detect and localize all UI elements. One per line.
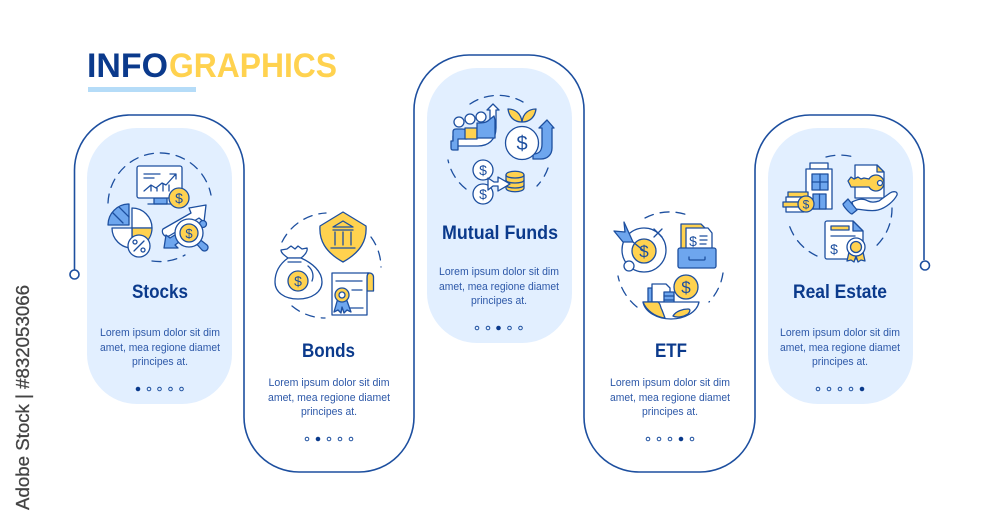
pagination: bonds <box>305 437 353 441</box>
pagination: etf <box>646 437 694 441</box>
text: stocks description: Lorem ipsum dolor sit dim <box>100 327 220 339</box>
icon: bonds: $ <box>294 273 302 289</box>
icon: etf: $ <box>639 242 649 261</box>
icon: mutual funds: $ <box>479 186 487 202</box>
text: real estate description: amet, mea regione diamet <box>780 342 900 354</box>
icon: stocks <box>108 153 211 262</box>
side credit text: Adobe Stock | #832053066 <box>13 285 33 510</box>
text: etf description <box>610 377 730 418</box>
title <box>87 47 337 92</box>
panel: stocks background <box>87 128 232 404</box>
text: mutual funds description: amet, mea regione diamet <box>439 281 559 293</box>
icon: mutual funds <box>448 95 554 204</box>
title: INFO <box>87 47 168 85</box>
text: etf description: principes at. <box>642 406 698 418</box>
icon: stocks: $ <box>185 226 193 241</box>
pagination: mutual funds <box>475 326 522 330</box>
text: stocks description: principes at. <box>132 356 188 368</box>
text: real estate description <box>780 327 900 368</box>
text: etf description: amet, mea regione diamet <box>610 392 730 404</box>
icon: etf: $ <box>681 278 691 297</box>
text: mutual funds description: principes at. <box>471 295 527 307</box>
heading: mutual funds: Mutual Funds <box>442 223 558 244</box>
text: etf description: Lorem ipsum dolor sit dim <box>610 377 730 389</box>
line end marker left <box>70 270 79 279</box>
icon: mutual funds: $ <box>479 162 487 178</box>
icon: stocks: $ <box>175 190 183 206</box>
icon: real estate: $ <box>830 241 838 257</box>
icon: etf <box>614 212 723 319</box>
heading: etf: ETF <box>655 341 687 362</box>
icon: mutual funds: $ <box>516 133 528 155</box>
icon: real estate <box>783 155 897 262</box>
text: mutual funds description <box>439 266 559 307</box>
text: real estate description: principes at. <box>812 356 868 368</box>
panel: real estate background <box>768 128 913 404</box>
text: bonds description: Lorem ipsum dolor sit dim <box>268 377 390 389</box>
text: stocks description <box>100 327 220 368</box>
panel: mutual funds background <box>427 68 572 343</box>
icon: real estate: $ <box>803 198 810 212</box>
heading: bonds: Bonds <box>302 341 355 362</box>
pagination: stocks <box>136 387 183 391</box>
pagination: real estate <box>816 387 864 391</box>
text: bonds description: principes at. <box>301 406 357 418</box>
text: bonds description <box>268 377 390 418</box>
heading: real estate: Real Estate <box>793 282 887 303</box>
text: stocks description: amet, mea regione diamet <box>100 342 220 354</box>
text: mutual funds description: Lorem ipsum dolor sit dim <box>439 266 559 278</box>
text: bonds description: amet, mea regione diamet <box>268 392 390 404</box>
text: real estate description: Lorem ipsum dolor sit dim <box>780 327 900 339</box>
heading: stocks: Stocks <box>132 282 188 303</box>
icon: bonds <box>275 212 381 318</box>
title: GRAPHICS <box>169 47 337 85</box>
line end marker right <box>920 261 930 270</box>
connecting outline <box>74 55 924 472</box>
icon: etf: $ <box>689 233 697 249</box>
